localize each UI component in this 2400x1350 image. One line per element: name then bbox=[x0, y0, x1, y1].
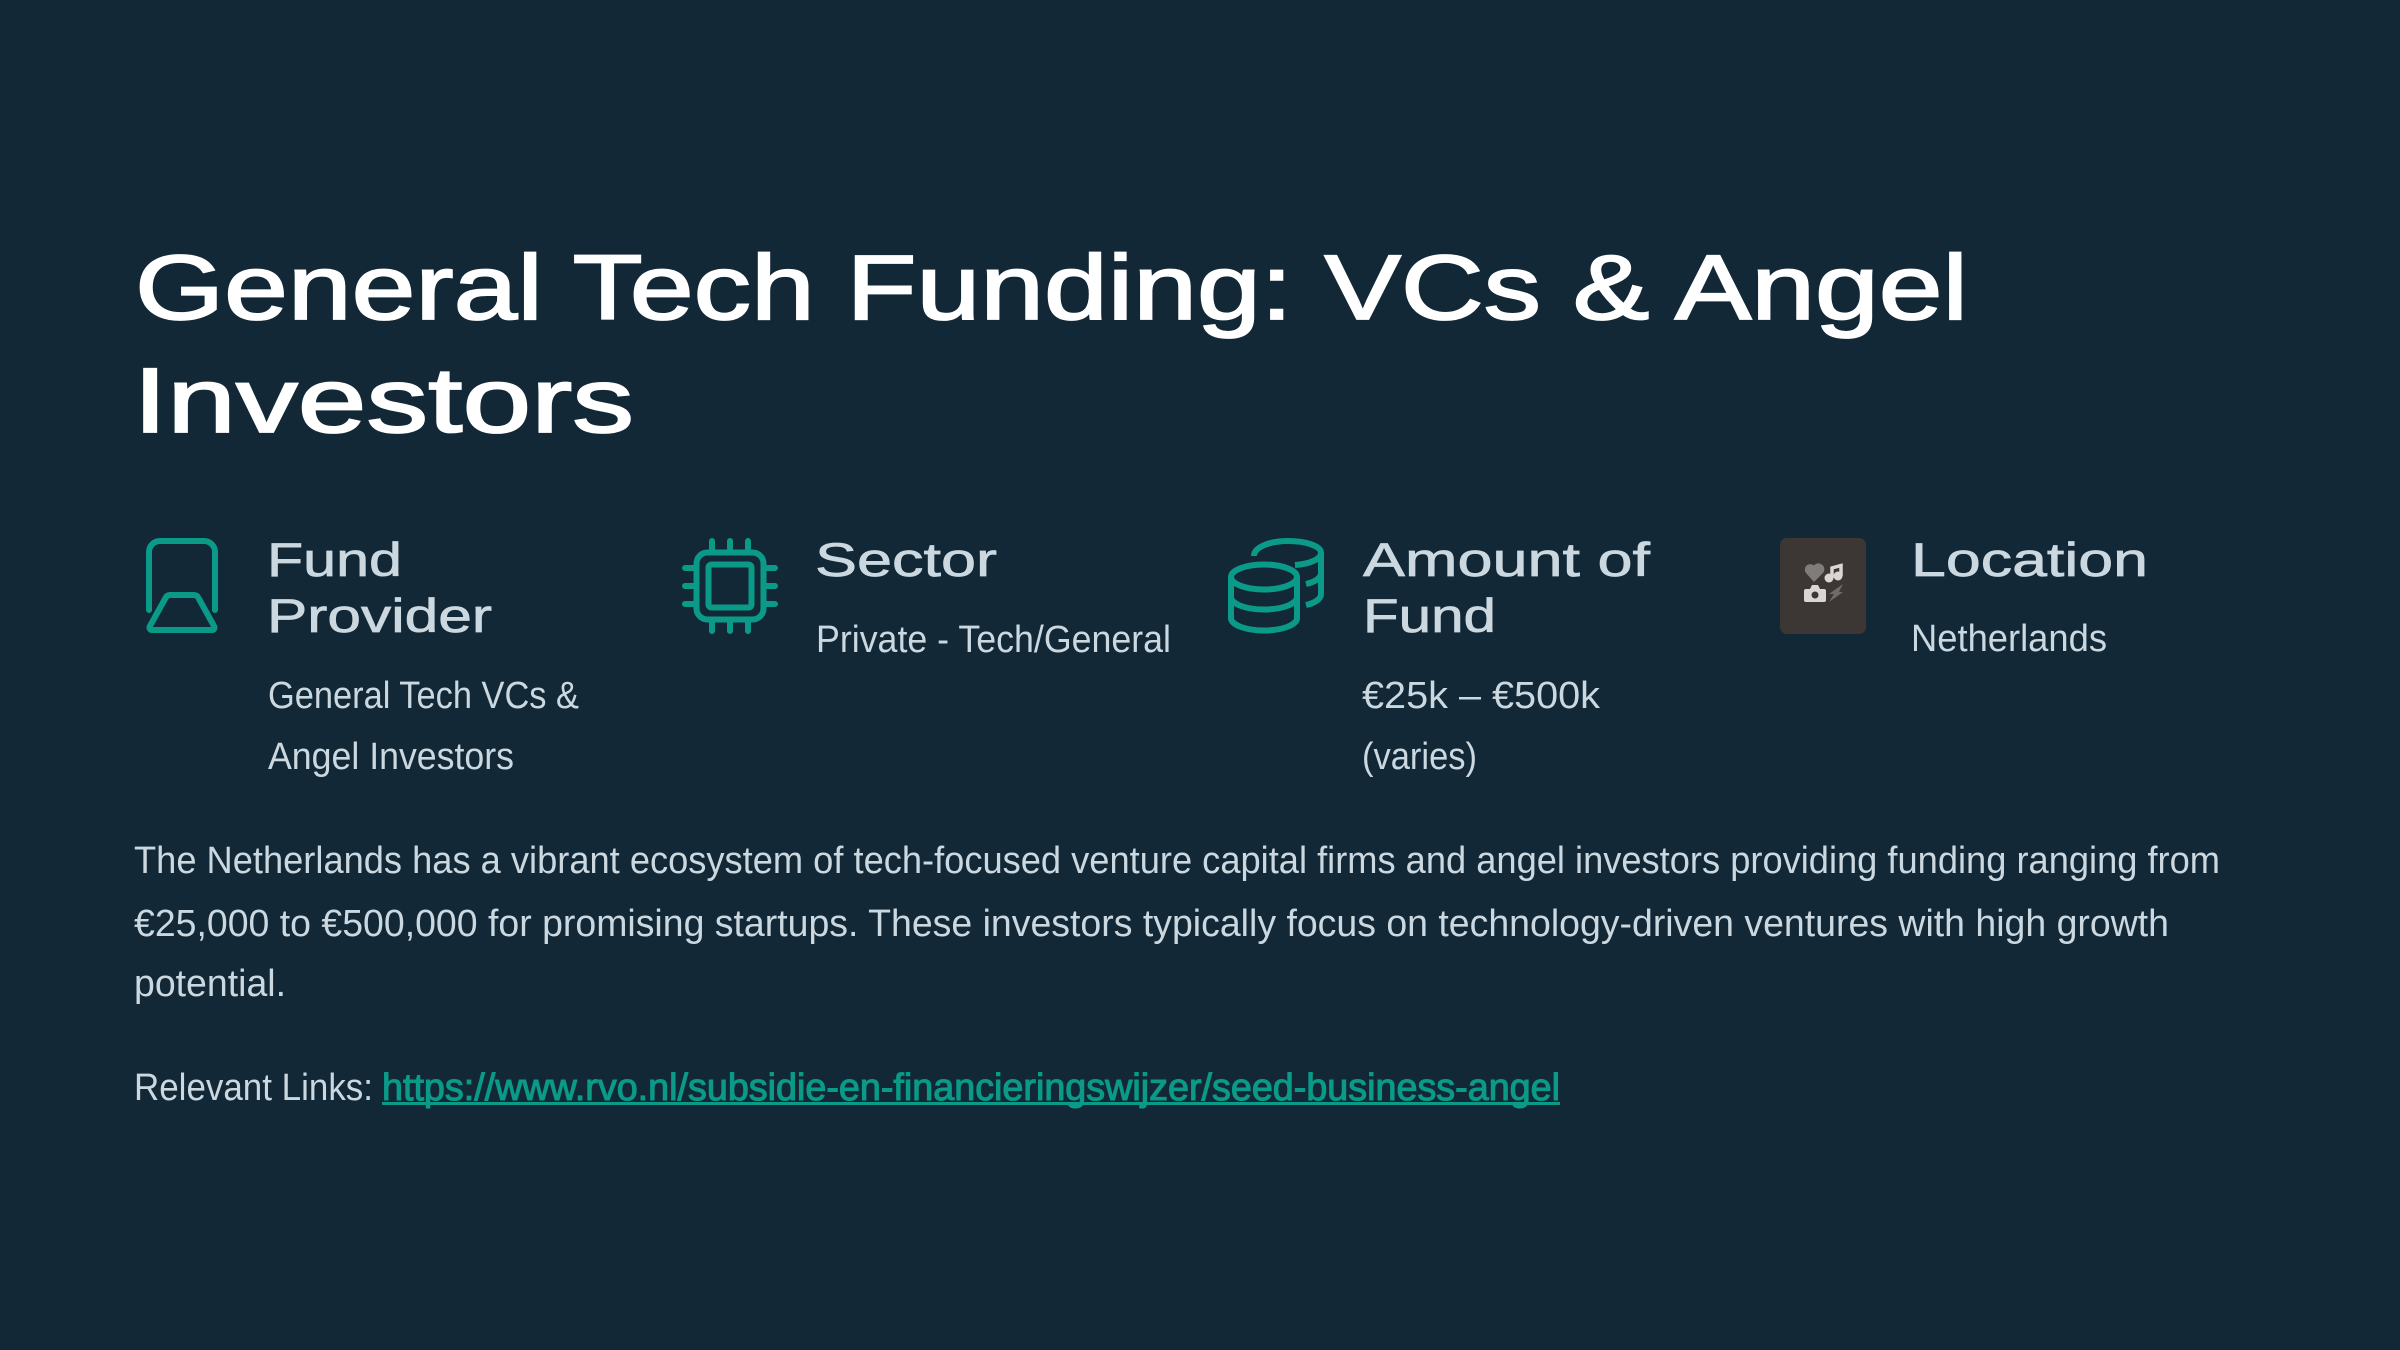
text: location value: Netherlands bbox=[1911, 618, 2107, 660]
icon: coins bbox=[1231, 541, 1321, 630]
heading: fund provider bbox=[267, 533, 492, 642]
heading: fund provider: Fund bbox=[267, 533, 402, 586]
panel: amount of fund bbox=[1231, 533, 1651, 778]
panel: fund provider bbox=[149, 533, 579, 778]
text: fund provider value: General Tech VCs & bbox=[268, 675, 579, 717]
heading: amount of fund: Fund bbox=[1363, 589, 1496, 642]
text: amount value: €25k – €500k bbox=[1362, 675, 1601, 717]
heading: location: Location bbox=[1911, 533, 2148, 586]
text: amount value bbox=[1362, 675, 1601, 778]
panel: location bbox=[1780, 533, 2148, 660]
title bbox=[133, 237, 1968, 452]
text: amount value: (varies) bbox=[1362, 736, 1477, 778]
icon: fund provider bbox=[149, 541, 215, 630]
text block: description: €25,000 to €500,000 for promising startups. These investors typically focus on technology-driven ventures with high growth bbox=[134, 903, 2169, 945]
title: General Tech Funding: VCs & Angel bbox=[135, 237, 1968, 339]
heading: amount of fund bbox=[1363, 533, 1651, 642]
text block: relevant links: Relevant Links: bbox=[134, 1067, 373, 1109]
text block: relevant links: https://www.rvo.nl/subsidie-en-financieringswijzer/seed-business-angel bbox=[382, 1067, 1560, 1109]
heading: fund provider: Provider bbox=[267, 589, 492, 642]
title: Investors bbox=[133, 350, 634, 452]
heading: amount of fund: Amount of bbox=[1363, 533, 1651, 586]
heading: sector: Sector bbox=[815, 533, 997, 586]
text: fund provider value: Angel Investors bbox=[268, 736, 514, 778]
panel: sector bbox=[685, 533, 1171, 661]
text block: description: The Netherlands has a vibrant ecosystem of tech-focused venture capital firms and angel investors providing funding ranging from bbox=[134, 840, 2220, 882]
icon: microchip bbox=[685, 541, 775, 631]
text block: description: potential. bbox=[134, 963, 286, 1005]
text: sector value: Private - Tech/General bbox=[816, 619, 1171, 661]
text: fund provider value bbox=[268, 675, 579, 778]
icon: location placeholder emoji tile bbox=[1780, 538, 1866, 634]
text block: description bbox=[134, 840, 2220, 1005]
